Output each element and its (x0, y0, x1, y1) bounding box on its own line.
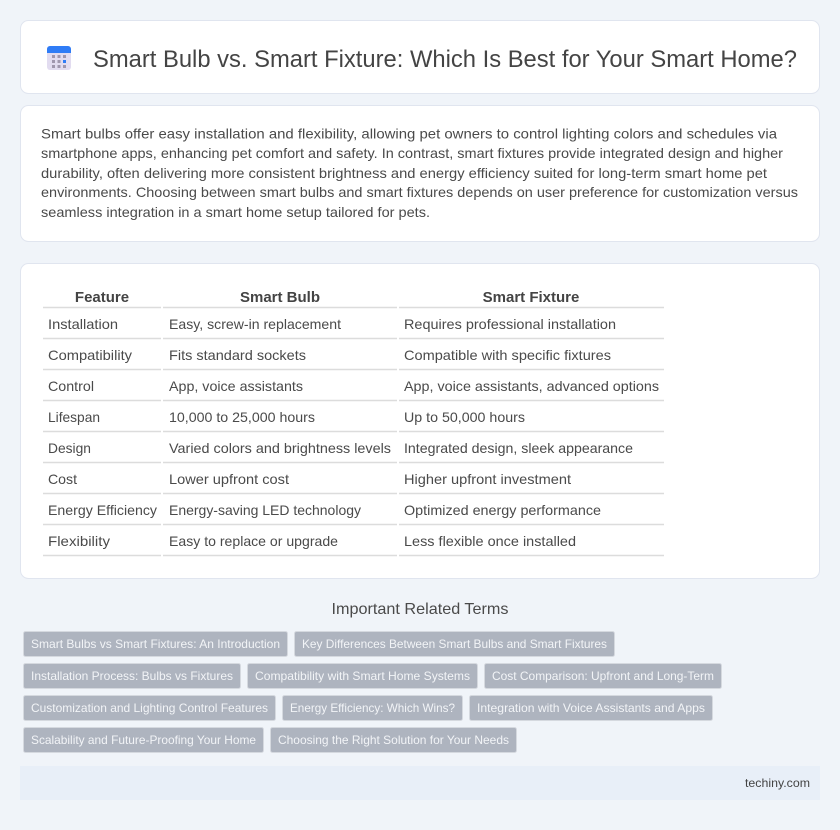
table rows: Less flexible once installed (404, 533, 576, 549)
tags: related terms: Installation Process: Bulbs vs Fixtures (31, 669, 233, 683)
panel: title header (20, 20, 820, 94)
title: Smart Bulb vs. Smart Fixture: Which Is Best for Your Smart Home? (93, 46, 797, 73)
table rows: Lower upfront cost (169, 471, 289, 487)
table rows: Up to 50,000 hours (404, 409, 525, 425)
intro paragraph: environments. Choosing between smart bulbs and smart fixtures depends on user preference for customization versus (41, 184, 798, 200)
table rows: Easy, screw-in replacement (169, 316, 341, 332)
heading: related terms: Important Related Terms (332, 601, 508, 618)
table rows: Varied colors and brightness levels (169, 440, 391, 456)
table rows: Requires professional installation (404, 316, 616, 332)
tags: related terms: Smart Bulbs vs Smart Fixtures: An Introduction (31, 637, 280, 651)
table header: Feature (75, 289, 129, 306)
table header: Smart Bulb (240, 289, 320, 306)
table rows: App, voice assistants (169, 378, 303, 394)
table rows: Cost (48, 471, 77, 487)
table rows: Higher upfront investment (404, 471, 571, 487)
table rows: Flexibility (48, 533, 110, 549)
icon: calendar (47, 46, 71, 70)
table rows: 10,000 to 25,000 hours (169, 409, 315, 425)
table rows: Installation (48, 316, 118, 332)
table rows: App, voice assistants, advanced options (404, 378, 659, 394)
table rows: Integrated design, sleek appearance (404, 440, 633, 456)
intro paragraph: smartphone apps, enhancing pet comfort and safety. In contrast, smart fixtures provide integrated design and higher (41, 145, 783, 161)
table rows: Energy-saving LED technology (169, 502, 361, 518)
table rows: Lifespan (48, 409, 100, 425)
intro paragraph: seamless integration in a smart home setup tailored for pets. (41, 204, 430, 220)
tags: related terms: Choosing the Right Solution for Your Needs (278, 733, 509, 747)
table rows: Compatibility (48, 347, 132, 363)
table rows: Easy to replace or upgrade (169, 533, 338, 549)
panel: intro text (20, 106, 820, 242)
panel: comparison table (20, 264, 820, 578)
tags: related terms: Integration with Voice Assistants and Apps (477, 701, 705, 715)
table header (75, 289, 579, 306)
table rows: Fits standard sockets (169, 347, 306, 363)
table header: Smart Fixture (483, 289, 579, 306)
table rows: Compatible with specific fixtures (404, 347, 611, 363)
table rows (48, 316, 659, 549)
table rows: Optimized energy performance (404, 502, 601, 518)
table rows: Energy Efficiency (48, 502, 157, 518)
tags: related terms (24, 632, 722, 752)
tags: related terms: Customization and Lighting Control Features (31, 701, 268, 715)
intro paragraph: Smart bulbs offer easy installation and flexibility, allowing pet owners to control lighting colors and schedules via (41, 126, 777, 142)
tags: related terms: Key Differences Between Smart Bulbs and Smart Fixtures (302, 637, 607, 651)
tags: related terms: Cost Comparison: Upfront and Long-Term (492, 669, 714, 683)
footer (20, 766, 820, 800)
footer source: techiny.com (745, 776, 810, 790)
intro paragraph (41, 126, 798, 220)
tags: related terms: Compatibility with Smart Home Systems (255, 669, 470, 683)
table rows: Control (48, 378, 94, 394)
tags: related terms: Scalability and Future-Proofing Your Home (31, 733, 256, 747)
table rows: Design (48, 440, 91, 456)
intro paragraph: durability, often delivering more consistent brightness and energy efficiency suited for long-term smart home pet (41, 165, 767, 181)
tags: related terms: Energy Efficiency: Which Wins? (290, 701, 455, 715)
